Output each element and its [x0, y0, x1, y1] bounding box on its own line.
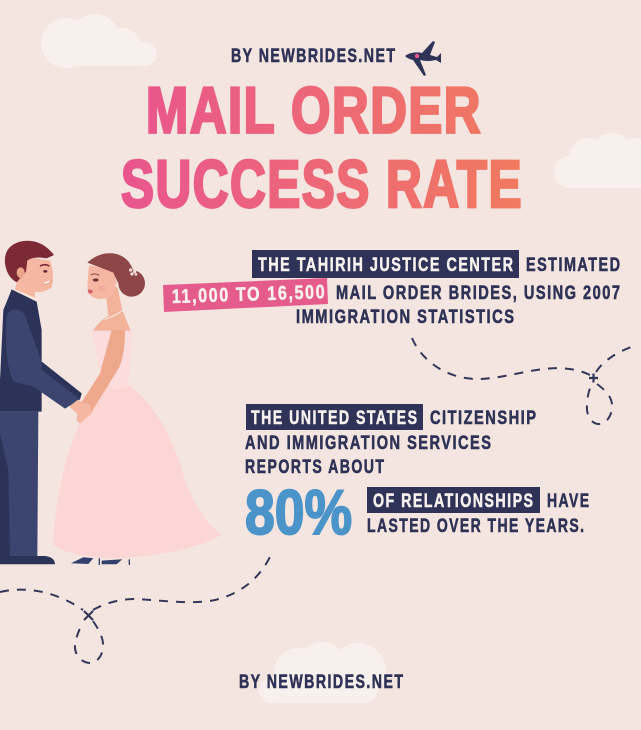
second fact block [245, 404, 590, 548]
label: The United States [246, 404, 423, 430]
text: citizenship: CITIZENSHIP [430, 407, 538, 429]
label: of relationships: OF RELATIONSHIPS [373, 490, 534, 512]
couple illustration [0, 241, 222, 565]
pink highlight: 11,000 to 16,500: 11,000 TO 16,500 [171, 281, 327, 308]
crossing mark: bottom path [84, 611, 93, 620]
dashed flight path: top right [412, 338, 637, 424]
label: The United States: THE UNITED STATES [251, 407, 418, 429]
byline: bottom: BY NEWBRIDES.NET [239, 671, 404, 693]
cloud: bottom [259, 642, 386, 703]
byline: top: BY NEWBRIDES.NET [231, 45, 396, 67]
icon: airplane [405, 41, 441, 76]
bride face and hair details [88, 268, 137, 294]
title line 1: MAIL ORDER [146, 74, 482, 146]
label: of relationships [367, 487, 540, 513]
text: immigration statistics: IMMIGRATION STATISTICS [296, 306, 516, 328]
stat: 80%: 80% [245, 478, 352, 548]
text: immigration services: AND IMMIGRATION SERVICES [245, 432, 492, 454]
label: Tahirih Justice Center [252, 250, 519, 278]
groom [0, 241, 82, 564]
clasped hands [69, 400, 92, 423]
bride [53, 253, 222, 565]
text: reports about: REPORTS ABOUT [245, 456, 386, 478]
label: Tahirih Justice Center: THE TAHIRIH JUSTICE CENTER [258, 254, 514, 276]
crossing mark: top path [589, 374, 598, 382]
first fact block [163, 250, 622, 328]
dashed flight path: bottom left [0, 550, 273, 663]
title [121, 74, 523, 222]
pink highlight: 11,000 to 16,500 [163, 278, 328, 312]
cloud: top right [554, 133, 641, 188]
text: have: HAVE [547, 490, 590, 512]
groom face details [40, 265, 52, 284]
cloud: top left [41, 14, 157, 68]
